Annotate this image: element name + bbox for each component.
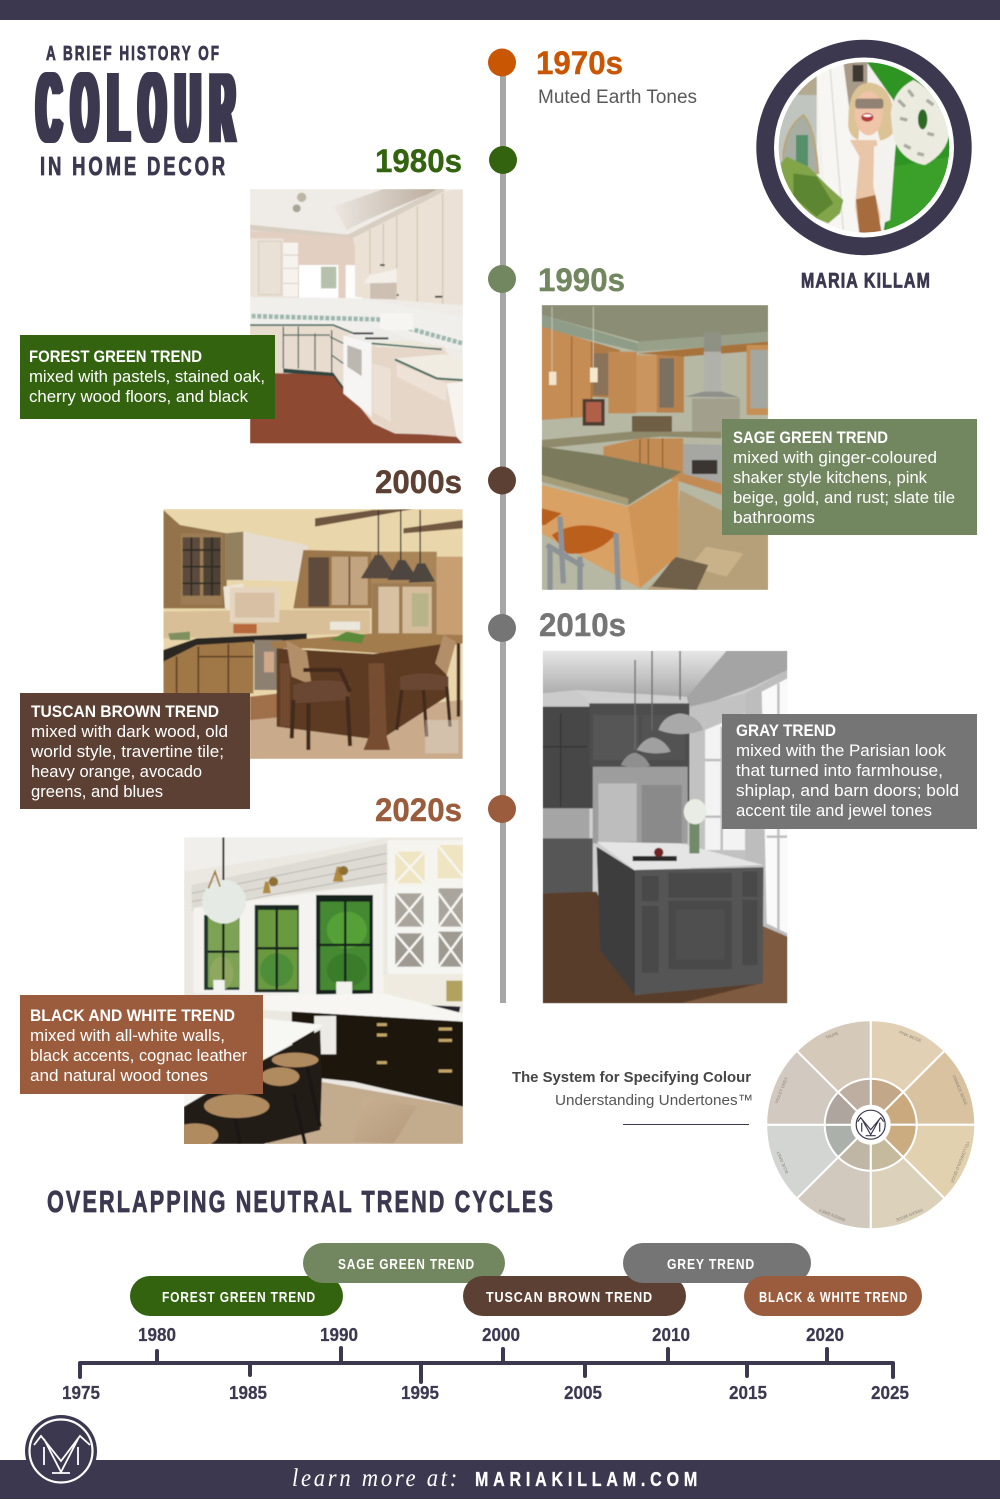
callout: black and white trend: black accents, cognac leather [30,1047,247,1065]
photo: 1990s sage and maple kitchen [542,305,768,590]
timeline dot 1980s [489,146,517,174]
text: system for specifying colour: The System for Specifying Colour [512,1069,751,1086]
callout: tuscan brown trend: TUSCAN BROWN TREND [31,703,219,721]
pill: black and white trend: BLACK & WHITE TREND [759,1290,908,1306]
pill: forest green trend [130,1276,343,1316]
wheel segment labels: PINK BEIGE [898,1030,922,1043]
photo: 1980s white kitchen [250,189,463,444]
callout: black and white trend: mixed with all-white walls, [30,1027,225,1045]
wheel segment labels [774,1030,971,1223]
year axis: 1975 [62,1383,100,1403]
footer: learn more at [292,1465,702,1492]
year axis: 2005 [564,1383,602,1403]
outer wheel segments [766,1020,975,1229]
callout: black and white trend [20,995,263,1094]
heading 2000s: 2000s [375,464,462,500]
wheel segment labels: GREEN BEIGE [895,1207,924,1223]
bottom bar [0,1460,1000,1499]
undertones colour wheel [766,1020,975,1229]
callout: forest green trend: FOREST GREEN TREND [29,348,202,366]
inner wheel segments [825,1079,917,1171]
callout: black and white trend: BLACK AND WHITE TREND [30,1007,235,1025]
heading 2020s: 2020s [375,792,462,828]
timeline dot 2000s [488,466,516,494]
callout: tuscan brown trend: world style, travertine tile; [30,743,224,761]
year axis: 1995 [401,1383,439,1403]
photo: 2010s gray kitchen [542,650,788,1004]
heading 1990s: 1990s [538,262,625,298]
portrait photo illustration [777,60,953,237]
callout: black and white trend: and natural wood tones [30,1067,208,1085]
heading: overlapping neutral trend cycles: OVERLAPPING NEUTRAL TREND CYCLES [47,1184,555,1219]
callout: forest green trend: cherry wood floors, and black [29,388,249,406]
text: system for specifying colour: Understanding Undertones™ [555,1092,753,1109]
vertical timeline line [500,60,506,1003]
year axis [62,1325,909,1403]
callout: gray trend: mixed with the Parisian look [736,742,947,760]
wheel segment labels: GREEN GREY [818,1207,846,1223]
top bar [0,0,1000,20]
year axis: 2000 [482,1325,520,1345]
callout: tuscan brown trend: heavy orange, avocado [31,763,202,781]
pill: sage green trend [303,1243,505,1283]
footer: learn more at: MARIAKILLAM.COM [475,1469,702,1491]
pill: tuscan brown trend [463,1276,686,1316]
callout: forest green trend: mixed with pastels, stained oak, [29,368,265,386]
portrait badge: maria killam [756,40,972,255]
wheel segment labels: YELLOW/GOLD BEIGE [949,1141,971,1184]
footer: learn more at: learn more at: [292,1465,460,1492]
heading 1980s: 1980s [375,143,462,179]
pill: tuscan brown trend: TUSCAN BROWN TREND [486,1290,653,1306]
year axis: 2020 [806,1325,844,1345]
year axis: 1985 [229,1383,267,1403]
callout: tuscan brown trend: greens, and blues [31,783,163,801]
pill: forest green trend: FOREST GREEN TREND [162,1290,316,1306]
title line: a brief history of: A BRIEF HISTORY OF [46,43,221,65]
callout: sage green trend [722,419,977,535]
pill: sage green trend: SAGE GREEN TREND [338,1257,475,1273]
logo badge [25,1415,97,1487]
wheel segment labels: VIOLET GREY [774,1076,789,1104]
timeline dot 1990s [488,265,516,293]
callout: gray trend: accent tile and jewel tones [736,802,932,820]
callout: sage green trend: mixed with ginger-coloured [733,449,937,467]
subheading muted earth tones: Muted Earth Tones [538,87,697,108]
year axis: 1980 [138,1325,176,1345]
timeline dot 2010s [488,614,516,642]
photo: 2000s tuscan kitchen [163,509,463,759]
timeline dot 1970s [488,48,516,76]
callout: sage green trend: bathrooms [733,509,815,527]
pill: grey trend: GREY TREND [667,1257,755,1273]
title [37,43,245,181]
timeline dot 2020s [488,795,516,823]
heading 2010s: 2010s [539,607,626,643]
callout: gray trend [722,714,977,829]
callout: forest green trend [20,335,275,419]
callout: sage green trend: shaker style kitchens, pink [733,469,928,487]
text: system for specifying colour [512,1069,753,1125]
callout: tuscan brown trend [20,693,250,809]
callout: gray trend: that turned into farmhouse, [736,762,943,780]
callout: gray trend: GRAY TREND [736,722,836,740]
callout: sage green trend: beige, gold, and rust; slate tile [733,489,955,507]
wheel segment labels: ORANGE BEIGE [952,1074,969,1106]
year axis: 2015 [729,1383,767,1403]
pill: black and white trend [744,1276,922,1316]
title line: colour: COLOUR [37,51,245,163]
callout: gray trend: shiplap, and barn doors; bold [736,782,959,800]
year axis: 2025 [871,1383,909,1403]
wheel segment labels: TAUPE [825,1030,840,1040]
photo: 2020s black and white kitchen [184,837,463,1144]
callout: sage green trend: SAGE GREEN TREND [733,429,888,447]
title line: in home decor: IN HOME DECOR [40,151,228,181]
year axis: 1990 [320,1325,358,1345]
wheel logo [856,1110,885,1139]
pill: grey trend [623,1243,811,1283]
heading 1970s: 1970s [536,45,623,81]
name: maria killam: MARIA KILLAM [801,270,931,292]
wheel segment labels: BLUE GREY [775,1150,789,1174]
callout: tuscan brown trend: mixed with dark wood, old [31,723,228,741]
year axis: 2010 [652,1325,690,1345]
